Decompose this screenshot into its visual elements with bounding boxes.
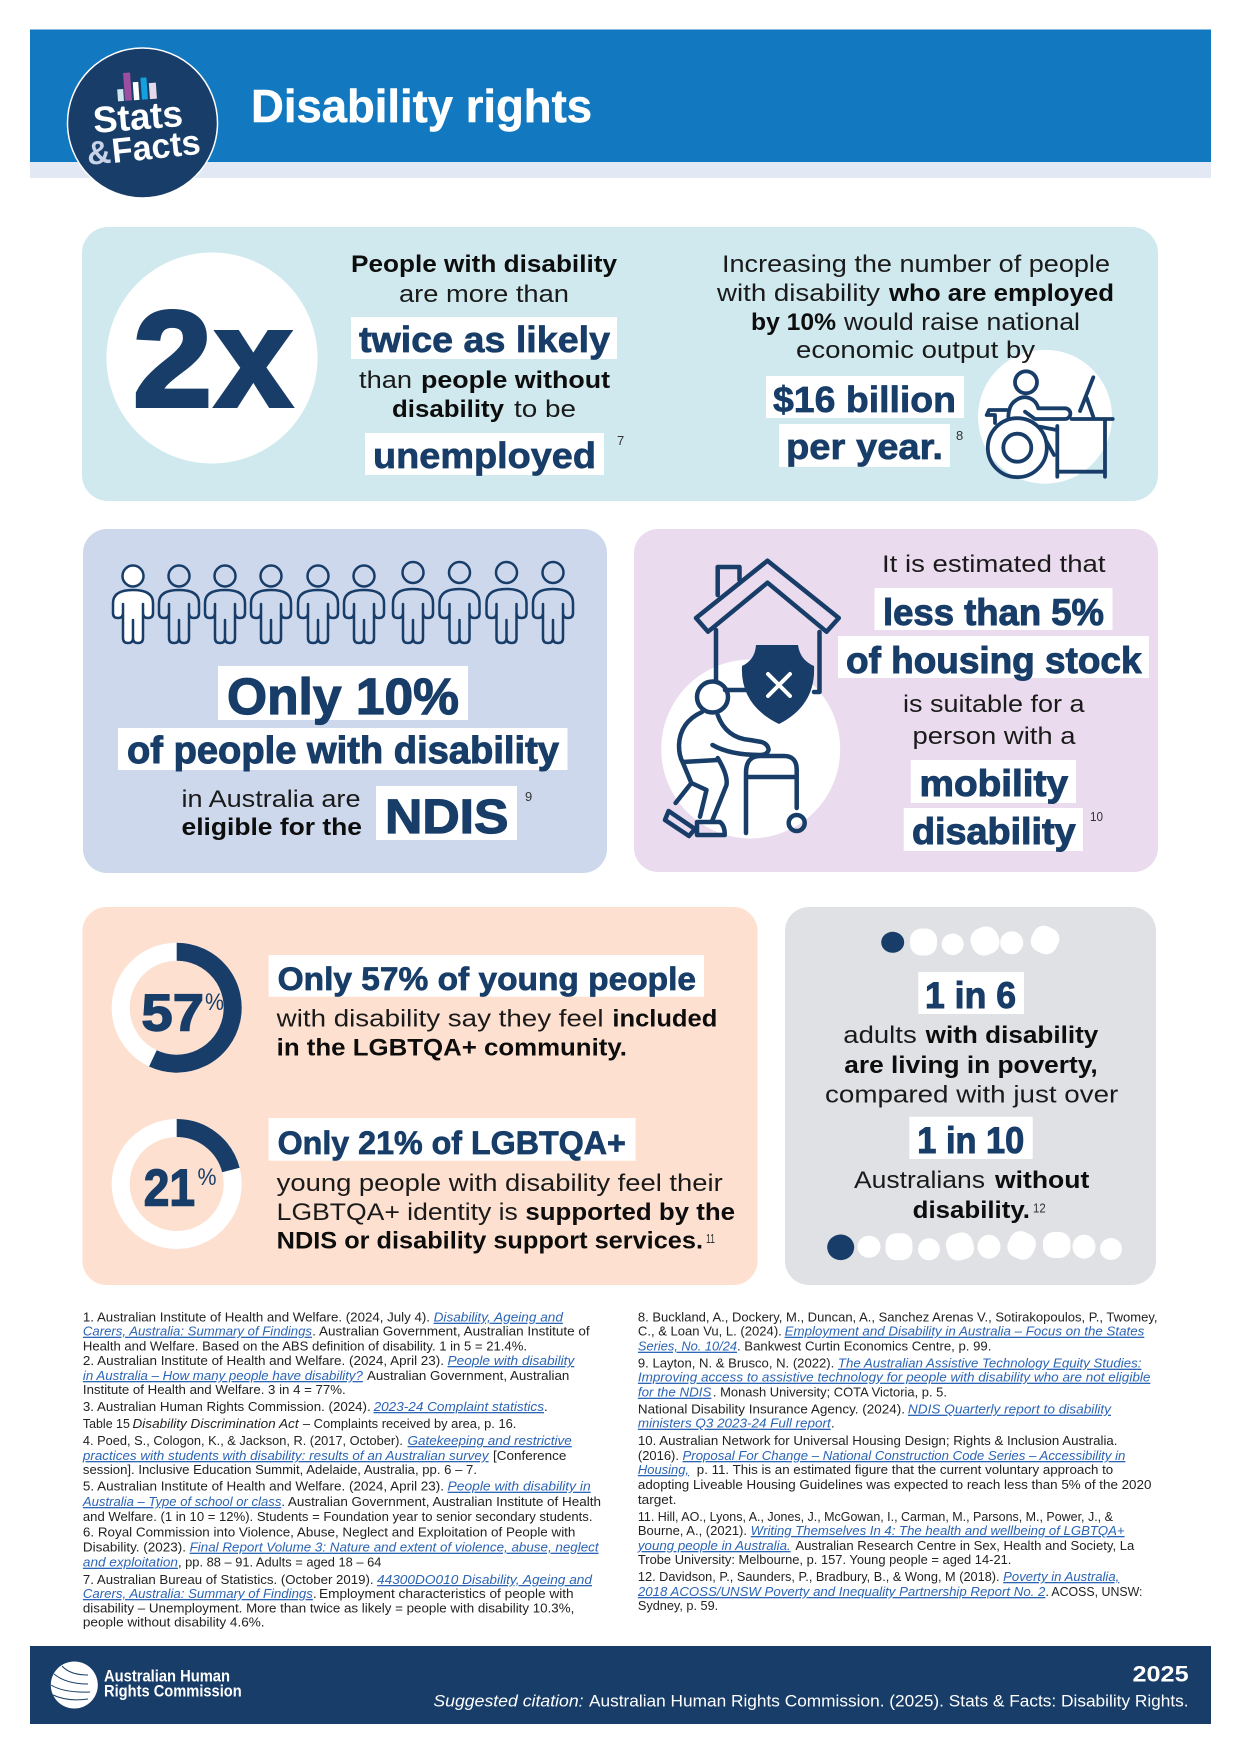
text block: less than 5% of housing stock: 10 <box>1090 809 1103 824</box>
big stat circle: 2x: x <box>215 279 292 436</box>
references: left column: 4. Poed, S., Cologon, K., & Jackson, R. (2017, October). <box>83 1433 403 1448</box>
references: right column: 9. Layton, N. & Brusco, N. (2022). <box>638 1356 834 1371</box>
references: right column: 12. Davidson, P., Saunders, P., Bradbury, B., & Wong, M (2018). <box>638 1569 1000 1584</box>
text block: 1 in 10: 12 <box>1033 1201 1046 1216</box>
references: right column: Sydney, p. 59. <box>638 1598 718 1613</box>
references: left column: Institute of Health and Welfare. 3 in 4 = 77%. <box>83 1382 346 1397</box>
references: left column: Australian Government, Australian Institute of Health <box>288 1494 601 1509</box>
big stat circle: 2x: 2 <box>133 283 212 435</box>
logo: Australian Human Rights Commission: Australian Human <box>104 1668 230 1686</box>
references: right column: NDIS Quarterly report to disability <box>908 1402 1113 1417</box>
suggested citation: Australian Human Rights Commission. (2025). Stats & Facts: Disability Rights. <box>589 1692 1189 1711</box>
references: left column: [Conference <box>493 1448 566 1463</box>
text block: raising economic output: with disability <box>716 280 880 307</box>
references: left column: . <box>312 1324 316 1339</box>
panel: employment <box>82 227 1158 501</box>
text block: 1 in 10: without <box>994 1167 1089 1194</box>
icon row: 1 in 10 dots <box>827 1227 1122 1263</box>
text block: 1 in 6 <box>825 972 1118 1108</box>
references: right column: for the NDIS <box>638 1385 712 1400</box>
text block: less than 5% of housing stock: disability <box>912 811 1076 852</box>
text block: 57% included: with disability say they feel <box>276 1006 604 1033</box>
references: left column: Employment characteristics of people with <box>319 1586 574 1601</box>
references: right column: Bourne, A., (2021). <box>638 1523 747 1538</box>
references: right column: . Bankwest Curtin Economics Centre, p. 99. <box>737 1339 991 1354</box>
references: right column: adopting Liveable Housing Guidelines was expected to reach less than 5% of the 2020 <box>638 1477 1151 1492</box>
text block: 1 in 6: are living in poverty, <box>844 1052 1098 1079</box>
panel: NDIS eligibility <box>83 529 607 873</box>
text block: less than 5% of housing stock <box>838 551 1149 852</box>
references: right column: Improving access to assistive technology for people with disability who are not eligible <box>638 1370 1150 1385</box>
references: right column: target. <box>638 1492 676 1507</box>
text block: less than 5% of housing stock: person with a <box>912 723 1076 750</box>
donut chart: 21% <box>121 1128 233 1240</box>
references: right column: The Australian Assistive Technology Equity Studies: <box>838 1356 1142 1371</box>
text block: twice as likely to be unemployed: 7 <box>617 433 624 448</box>
text block: less than 5% of housing stock: mobility <box>920 763 1068 804</box>
text block: 21% supported: Only 21% of LGBTQA+ <box>278 1125 626 1161</box>
text block: 1 in 10 <box>854 1117 1089 1224</box>
references: left column: Carers, Australia: Summary of Findings <box>83 1586 313 1601</box>
text block: raising economic output: who are employed <box>888 280 1114 307</box>
references: left column: 6. Royal Commission into Violence, Abuse, Neglect and Exploitation of People with <box>83 1525 575 1540</box>
references: right column: . <box>1045 1584 1049 1599</box>
references: right column: ministers Q3 2023-24 Full report <box>638 1416 832 1431</box>
callout: per year: per year. <box>786 426 943 467</box>
references: right column: 8. Buckland, A., Dockery, M., Duncan, A., Sanchez Arenas V., Sotirakopoulos, P., Twomey, <box>638 1310 1158 1325</box>
text block: raising economic output: Increasing the number of people <box>722 251 1110 278</box>
text block: 57% included <box>269 955 717 1062</box>
references: right column: 10. Australian Network for Universal Housing Design; Rights & Inclusion Australia. <box>638 1433 1118 1448</box>
references: left column: 3. Australian Human Rights Commission. (2024). <box>83 1399 371 1414</box>
text block: raising economic output: would raise national <box>843 309 1080 336</box>
text block: twice as likely to be unemployed: to be <box>514 396 576 423</box>
references: left column: 2. Australian Institute of Health and Welfare. (2024, April 23). <box>83 1353 444 1368</box>
callout: of people with disability: of people with disability <box>127 730 559 772</box>
icon row: 1 in 6 dots <box>881 922 1063 959</box>
text block: eligible for the NDIS: 9 <box>525 789 532 804</box>
references: left column: Disability Discrimination Act <box>132 1416 300 1431</box>
big stat circle: 2x <box>106 252 318 464</box>
text block: eligible for the NDIS <box>182 786 532 844</box>
logo badge: Stats & Facts: & <box>85 133 113 172</box>
references: left column: . <box>281 1494 285 1509</box>
references: left column: . <box>313 1586 317 1601</box>
text block: 21% supported: young people with disability feel their <box>277 1170 723 1197</box>
callout: per year: 8 <box>956 428 963 443</box>
header banner <box>30 30 1211 198</box>
references: right column: p. 11. This is an estimated figure that the current voluntary approach to <box>697 1462 1113 1477</box>
donut chart: 21%: 21 <box>144 1160 195 1218</box>
text block: eligible for the NDIS: NDIS <box>385 791 508 844</box>
text block: raising economic output <box>716 251 1114 364</box>
text block: eligible for the NDIS: in Australia are <box>182 786 360 813</box>
references: right column: Writing Themselves In 4: The health and wellbeing of LGBTQA+ <box>751 1523 1125 1538</box>
references: left column: , pp. 88 – 91. Adults = aged 18 – 64 <box>178 1555 381 1570</box>
text block: 21% supported: supported by the <box>525 1199 735 1226</box>
references: right column: Series, No. 10/24 <box>638 1339 737 1354</box>
references: left column: 7. Australian Bureau of Statistics. (October 2019). <box>83 1572 374 1587</box>
title: Disability rights <box>251 80 592 132</box>
text block: twice as likely to be unemployed: People with disability <box>351 251 618 278</box>
references: right column: Trobe University: Melbourne, p. 157. Young people = aged 14-21. <box>638 1552 1011 1567</box>
references: right column: 2018 ACOSS/UNSW Poverty and Inequality Partnership Report No. 2 <box>637 1584 1046 1599</box>
references: left column: 1. Australian Institute of Health and Welfare. (2024, July 4). <box>83 1310 430 1325</box>
suggested citation: Suggested citation: <box>433 1692 584 1711</box>
text block: 21% supported: NDIS or disability support services. <box>277 1227 703 1254</box>
text block: twice as likely to be unemployed: than <box>359 367 412 394</box>
references: right column: Employment and Disability in Australia – Focus on the States <box>785 1324 1145 1339</box>
references: left column: Gatekeeping and restrictive <box>408 1433 572 1448</box>
references: left column: Final Report Volume 3: Nature and extent of violence, abuse, neglect <box>190 1540 600 1555</box>
references: right column: . <box>831 1416 835 1431</box>
references: left column: session]. Inclusive Education Summit, Adelaide, Australia, pp. 6 – 7. <box>83 1462 477 1477</box>
text block: twice as likely to be unemployed: unemployed <box>373 435 596 476</box>
references: left column: and exploitation <box>83 1555 178 1570</box>
references: right column: Poverty in Australia, <box>1003 1569 1119 1584</box>
icon: person with walker in front of house with shield <box>661 561 840 838</box>
logo: Australian Human Rights Commission: Rights Commission <box>104 1683 242 1701</box>
text block: eligible for the NDIS: eligible for the <box>182 814 362 841</box>
text block: less than 5% of housing stock: less than 5% <box>883 592 1104 633</box>
references: left column: people without disability 4.6%. <box>83 1615 265 1630</box>
references: right column: Australian Research Centre in Sex, Health and Society, La <box>795 1538 1135 1553</box>
donut chart: 57% <box>121 952 233 1064</box>
text block: 1 in 10: disability. <box>913 1197 1030 1224</box>
donut chart: 57%: % <box>205 989 224 1016</box>
references: left column: practices with students with disability: results of an Australian survey <box>82 1448 490 1463</box>
text block: 1 in 10: 1 in 10 <box>917 1120 1024 1161</box>
text block: twice as likely to be unemployed: twice as likely <box>359 319 610 360</box>
references: right column: . Monash University; COTA Victoria, p. 5. <box>713 1385 947 1400</box>
text block: less than 5% of housing stock: It is estimated that <box>882 551 1106 578</box>
logo: Australian Human Rights Commission <box>51 1662 242 1708</box>
text block: 57% included: Only 57% of young people <box>278 961 696 997</box>
text block: 1 in 6: with disability <box>925 1022 1099 1049</box>
references: right column: C., & Loan Vu, L. (2024). <box>638 1324 782 1339</box>
donut chart: 57%: 57 <box>141 985 204 1043</box>
text block: 1 in 6: 1 in 6 <box>925 975 1016 1016</box>
panel: LGBTQA+ young people <box>82 907 758 1285</box>
references: left column: Table 15 <box>83 1416 130 1431</box>
logo badge: Stats & Facts: Stats <box>91 93 184 141</box>
references: right column: Proposal For Change – National Construction Code Series – Accessibility in <box>682 1448 1125 1463</box>
text block: less than 5% of housing stock: is suitable for a <box>903 691 1085 718</box>
references: right column: young people in Australia. <box>637 1538 791 1553</box>
text block: 1 in 10: Australians <box>854 1167 985 1194</box>
logo badge: Stats & Facts: Facts <box>110 123 202 171</box>
text block: 21% supported: 11 <box>706 1231 715 1246</box>
icon row: ten people, one highlighted <box>113 562 573 643</box>
references: left column <box>82 1310 601 1630</box>
text block: twice as likely to be unemployed: are more than <box>399 281 569 308</box>
references: right column: Housing, <box>638 1462 689 1477</box>
references: left column: Carers, Australia: Summary of Findings <box>83 1324 313 1339</box>
references: left column: Health and Welfare. Based on the ABS definition of disability. 1 in 5 = 21.4%. <box>83 1339 527 1354</box>
references: left column: disability – Unemployment. More than twice as likely = people with disability 10.3%, <box>83 1601 574 1616</box>
text block: 57% included: in the LGBTQA+ community. <box>277 1035 627 1062</box>
logo badge: Stats & Facts <box>68 48 218 198</box>
references: left column: Disability, Ageing and <box>434 1310 564 1325</box>
text block: 1 in 6: adults <box>843 1022 917 1049</box>
references: right column <box>637 1310 1158 1613</box>
references: left column: People with disability <box>448 1353 576 1368</box>
references: left column: in Australia – How many people have disability? <box>83 1368 364 1383</box>
references: left column: 5. Australian Institute of Health and Welfare. (2024, April 23). <box>83 1479 444 1494</box>
references: right column: 11. Hill, AO., Lyons, A., Jones, J., McGowan, I., Carman, M., Parsons, M., Power, J., & <box>638 1509 1113 1524</box>
panel: poverty <box>785 907 1156 1285</box>
references: left column: People with disability in <box>448 1479 591 1494</box>
references: left column: Disability. (2023). <box>83 1540 186 1555</box>
icon: person in wheelchair at desk <box>978 350 1113 484</box>
year: 2025 <box>1132 1662 1189 1687</box>
text block: raising economic output: economic output by <box>796 337 1035 364</box>
text block: twice as likely to be unemployed: people without <box>421 367 610 394</box>
text block: raising economic output: by 10% <box>751 309 836 336</box>
references: right column: National Disability Insurance Agency. (2024). <box>638 1402 905 1417</box>
references: left column: Australian Government, Australian <box>367 1368 569 1383</box>
text block: twice as likely to be unemployed: disability <box>392 396 505 423</box>
references: left column: Australian Government, Australian Institute of <box>319 1324 590 1339</box>
text block: 21% supported: LGBTQA+ identity is <box>277 1199 518 1226</box>
donut chart: 21%: % <box>198 1164 216 1191</box>
references: left column: 44300DO010 Disability, Ageing and <box>377 1572 593 1587</box>
references: left column: Australia – Type of school or class <box>82 1494 282 1509</box>
references: left column: and Welfare. (1 in 10 = 12%). Students = Foundation year to senior secondary students. <box>83 1509 593 1524</box>
references: left column: – Complaints received by area, p. 16. <box>303 1416 516 1431</box>
text block: 57% included: included <box>612 1006 717 1033</box>
footer bar <box>30 1646 1211 1724</box>
text block: 1 in 6: compared with just over <box>825 1081 1118 1108</box>
text block: twice as likely to be unemployed <box>351 251 624 476</box>
references: left column: 2023-24 Complaint statistics <box>373 1399 545 1414</box>
references: right column: ACOSS, UNSW: <box>1051 1584 1142 1599</box>
text block: 21% supported <box>269 1118 735 1254</box>
text block: less than 5% of housing stock: of housing stock <box>846 640 1142 681</box>
references: left column: . <box>544 1399 548 1414</box>
references: right column: (2016). <box>638 1448 679 1463</box>
callout: only 10%: Only 10% <box>227 668 459 725</box>
panel: housing stock <box>634 529 1158 872</box>
callout: $16 billion: $16 billion <box>773 379 956 420</box>
